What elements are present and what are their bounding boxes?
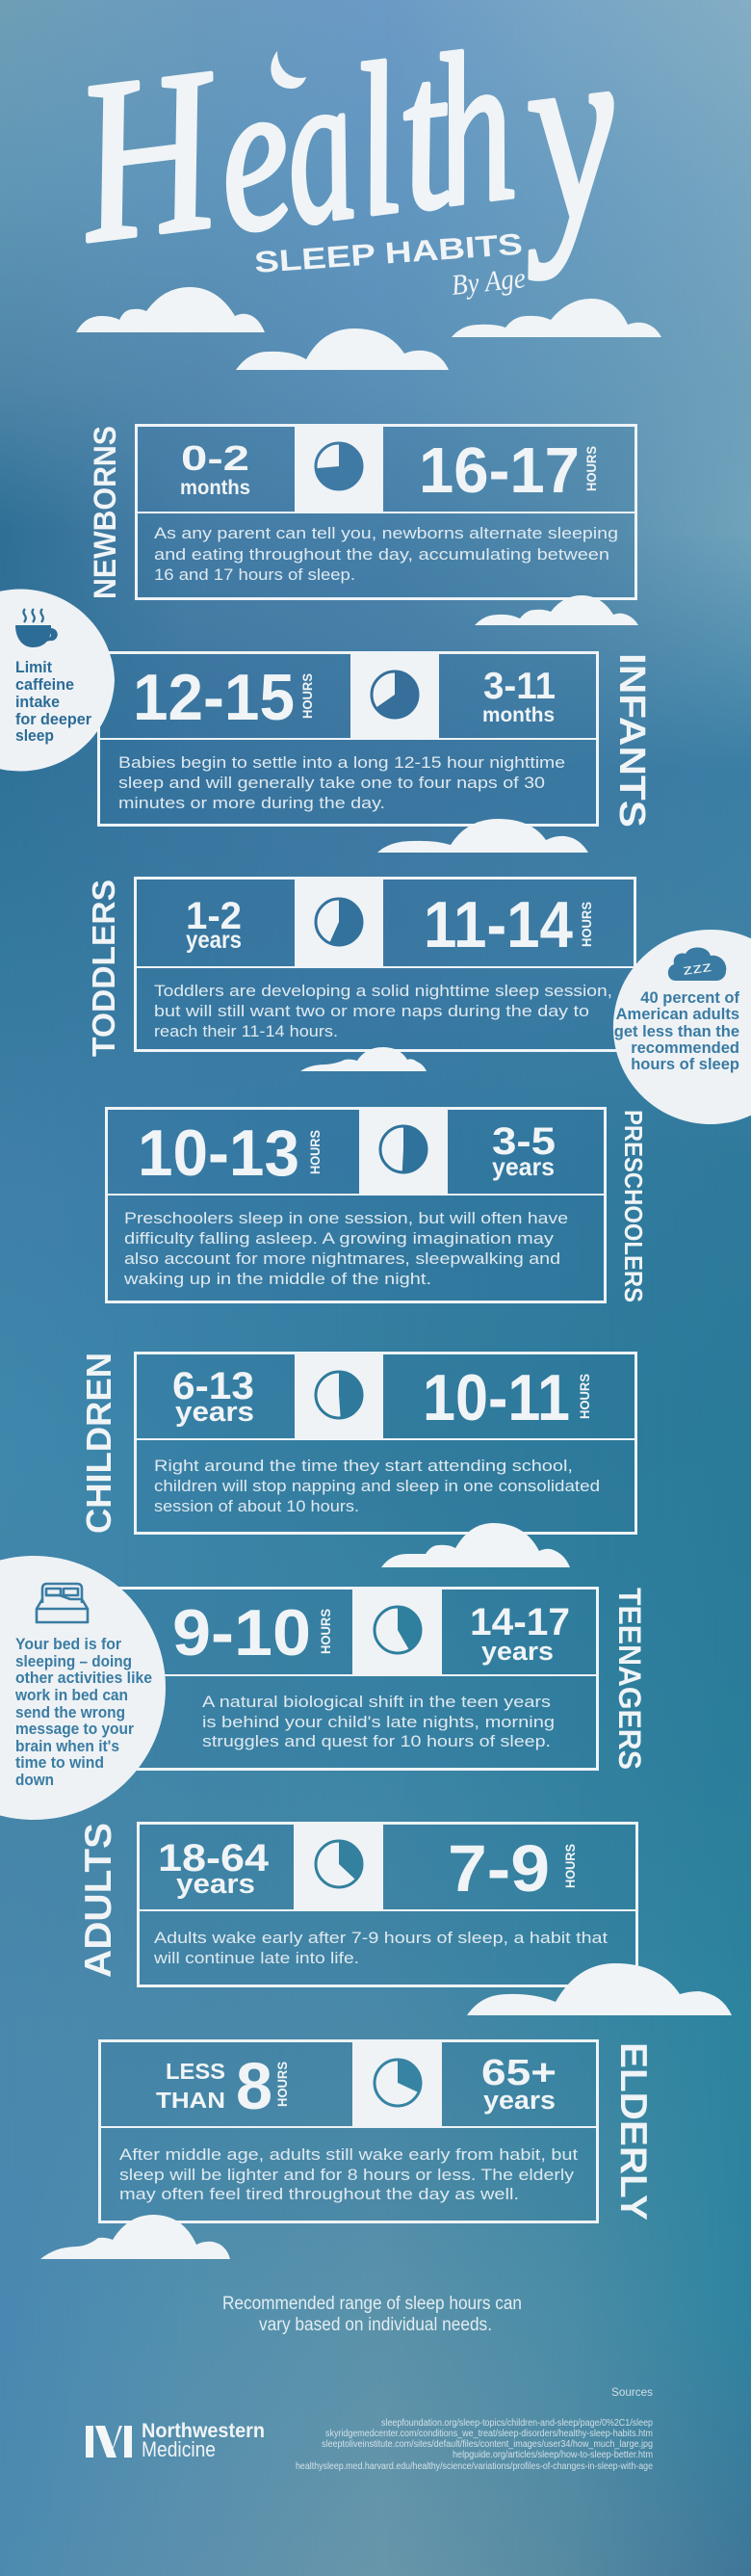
age: 3-5: 3-5 bbox=[492, 1120, 556, 1163]
description: will continue late into life. bbox=[153, 1949, 359, 1967]
icon: clock newborns bbox=[316, 443, 362, 489]
sources bbox=[296, 2385, 653, 2472]
tip text: intake bbox=[15, 694, 60, 711]
label: toddlers: TODDLERS bbox=[86, 880, 121, 1057]
tip text: brain when it's bbox=[15, 1738, 119, 1755]
hours unit: HOURS bbox=[307, 1130, 323, 1174]
title: Healthy: t bbox=[385, 11, 464, 256]
panel: infants bbox=[97, 651, 599, 827]
tip text: Limit bbox=[15, 659, 52, 676]
icon: clock children bbox=[316, 1372, 363, 1418]
cloud after toddlers bbox=[300, 1047, 427, 1071]
age: 65+: 65+ bbox=[481, 2053, 557, 2093]
cloud after newborns bbox=[475, 595, 638, 625]
label: elderly: ELDERLY bbox=[612, 2042, 654, 2221]
description: sleep and will generally take one to four naps of 30 bbox=[118, 774, 545, 792]
age: 6-13: 6-13 bbox=[172, 1365, 254, 1407]
description: is behind your child's late nights, morning bbox=[202, 1713, 555, 1731]
description: Adults wake early after 7-9 hours of sleep, a habit that bbox=[154, 1929, 608, 1947]
icon: clock preschoolers bbox=[380, 1126, 427, 1172]
description: 16 and 17 hours of sleep. bbox=[154, 565, 355, 584]
icon: clock elderly bbox=[375, 2060, 421, 2106]
label: infants: INFANTS bbox=[611, 653, 652, 828]
hours: 10-13: 10-13 bbox=[138, 1117, 299, 1190]
description: A natural biological shift in the teen years bbox=[202, 1693, 551, 1711]
callout: 40 percent bbox=[613, 930, 751, 1124]
age unit: years bbox=[483, 2086, 556, 2115]
description: may often feel tired throughout the day as well. bbox=[119, 2185, 519, 2203]
hours: less than 8: THAN bbox=[156, 2088, 225, 2113]
tip text: caffeine bbox=[15, 676, 74, 694]
sources: Sources bbox=[611, 2385, 653, 2399]
icon: coffee cup bbox=[15, 609, 58, 647]
tip text: time to wind bbox=[15, 1754, 104, 1772]
icon: sleeping cloud: zzz bbox=[682, 959, 712, 979]
panel: newborns bbox=[135, 424, 637, 600]
description: After middle age, adults still wake early from habit, but bbox=[119, 2145, 578, 2164]
description: children will stop napping and sleep in one consolidated bbox=[154, 1477, 600, 1495]
sources: sleeptoliveinstitute.com/sites/default/files/content_images/user34/how_much_large.jpg bbox=[322, 2439, 653, 2450]
hours: 9-10: 9-10 bbox=[172, 1596, 311, 1669]
age: 3-11: 3-11 bbox=[483, 666, 556, 707]
tip text: for deeper bbox=[15, 711, 92, 728]
label: preschoolers: PRESCHOOLERS bbox=[619, 1110, 648, 1302]
callout: caffeine bbox=[0, 590, 115, 771]
hours unit: HOURS bbox=[583, 446, 599, 491]
panel: preschoolers bbox=[105, 1107, 607, 1303]
label: children: CHILDREN bbox=[79, 1353, 118, 1534]
hours unit: HOURS bbox=[299, 673, 315, 719]
age unit: years bbox=[186, 927, 242, 954]
icon: clock adults bbox=[316, 1841, 362, 1887]
label: teenagers: TEENAGERS bbox=[612, 1588, 647, 1770]
age unit: months bbox=[482, 704, 555, 726]
logo: Northwestern Medicine: Northwestern bbox=[142, 2420, 265, 2442]
hours: less than 8 bbox=[156, 2049, 272, 2123]
callout: bed bbox=[0, 1556, 166, 1820]
subtitle: Sleep Habits: SLEEP HABITS bbox=[253, 227, 524, 279]
description: Preschoolers sleep in one session, but will often have bbox=[124, 1209, 568, 1227]
age unit: years bbox=[175, 1397, 254, 1428]
panel: children bbox=[134, 1352, 637, 1535]
hours: 10-11: 10-11 bbox=[423, 1361, 570, 1434]
description: difficulty falling asleep. A growing imagination may bbox=[124, 1229, 555, 1248]
icon: NM mark bbox=[86, 2426, 132, 2458]
description: Right around the time they start attending school, bbox=[154, 1457, 573, 1475]
panel: toddlers bbox=[134, 877, 636, 1052]
description: As any parent can tell you, newborns alternate sleeping bbox=[154, 524, 618, 542]
hours: 11-14: 11-14 bbox=[424, 888, 573, 961]
cloud left bbox=[76, 287, 265, 332]
cloud center bbox=[236, 329, 449, 370]
age: 14-17: 14-17 bbox=[470, 1601, 570, 1643]
age: 1-2: 1-2 bbox=[186, 895, 242, 937]
panel: elderly bbox=[98, 2039, 599, 2223]
description: Babies begin to settle into a long 12-15 hour nighttime bbox=[118, 753, 565, 772]
tip text: get less than the bbox=[614, 1023, 739, 1040]
sources: sleepfoundation.org/sleep-topics/children-and-sleep/page/0%2C1/sleep bbox=[381, 2418, 653, 2429]
panel: adults bbox=[137, 1822, 638, 1987]
age unit: years bbox=[176, 1869, 255, 1900]
title: Healthy: e bbox=[205, 31, 302, 278]
panel: teenagers bbox=[97, 1587, 599, 1771]
title: Healthy: h bbox=[422, 4, 526, 251]
closing note: Recommended range of sleep hours can bbox=[222, 2294, 522, 2314]
cloud after adults bbox=[467, 1963, 732, 2015]
logo: Northwestern Medicine bbox=[86, 2420, 265, 2461]
description: session of about 10 hours. bbox=[154, 1497, 359, 1515]
cloud after elderly bbox=[40, 2215, 230, 2259]
sources: healthysleep.med.harvard.edu/healthy/science/variations/profiles-of-changes-in-sleep-with-age bbox=[296, 2461, 653, 2472]
age unit: months bbox=[180, 477, 250, 499]
tip text: hours of sleep bbox=[631, 1056, 739, 1073]
hours unit: HOURS bbox=[318, 1609, 333, 1654]
tip text: sleeping – doing bbox=[15, 1653, 132, 1670]
age: 18-64: 18-64 bbox=[158, 1837, 270, 1879]
description: Toddlers are developing a solid nighttime sleep session, bbox=[154, 982, 612, 1000]
icon: clock infants bbox=[372, 671, 418, 718]
tip text: down bbox=[15, 1772, 54, 1789]
title: Healthy: H bbox=[63, 19, 237, 291]
hours unit: HOURS bbox=[579, 902, 594, 947]
cloud after infants bbox=[377, 819, 588, 853]
title block bbox=[63, 0, 634, 334]
tip text: other activities like bbox=[15, 1669, 152, 1687]
description: but will still want two or more naps during the day to bbox=[154, 1002, 589, 1020]
sources: helpguide.org/articles/sleep/how-to-sleep-better.htm bbox=[453, 2450, 653, 2460]
description: sleep will be lighter and for 8 hours or less. The elderly bbox=[119, 2166, 575, 2184]
tip text: American adults bbox=[616, 1006, 739, 1023]
description: minutes or more during the day. bbox=[118, 794, 385, 812]
cloud after children bbox=[381, 1523, 570, 1567]
label: adults: ADULTS bbox=[78, 1823, 119, 1978]
description: reach their 11-14 hours. bbox=[154, 1022, 338, 1040]
description: also account for more nightmares, sleepwalking and bbox=[124, 1249, 560, 1268]
tip text: Your bed is for bbox=[15, 1636, 122, 1653]
hours unit: HOURS bbox=[562, 1844, 578, 1888]
description: waking up in the middle of the night. bbox=[123, 1270, 431, 1288]
title: Healthy: l bbox=[340, 17, 413, 262]
age unit: years bbox=[481, 1637, 554, 1666]
description: struggles and quest for 10 hours of sleep. bbox=[202, 1732, 551, 1750]
icon: sleeping cloud bbox=[668, 947, 726, 981]
subtitle: By Age: By Age bbox=[450, 262, 527, 302]
icon: clock toddlers bbox=[316, 899, 362, 945]
tip text: send the wrong bbox=[15, 1704, 125, 1722]
icon: clock teenagers bbox=[375, 1607, 421, 1653]
tip text: recommended bbox=[631, 1039, 739, 1057]
description: and eating throughout the day, accumulating between bbox=[154, 545, 609, 564]
sources: skyridgemedcenter.com/conditions_we_treat/sleep-disorders/healthy-sleep-habits.htm bbox=[325, 2429, 653, 2439]
hours unit: HOURS bbox=[577, 1374, 592, 1419]
tip text: work in bed can bbox=[14, 1687, 128, 1704]
label: newborns: NEWBORNS bbox=[88, 426, 122, 599]
age unit: years bbox=[492, 1152, 555, 1181]
icon: crescent moon bbox=[271, 51, 306, 89]
hours: 12-15: 12-15 bbox=[133, 661, 295, 734]
cloud right bbox=[452, 299, 661, 337]
closing note: vary based on individual needs. bbox=[259, 2315, 492, 2335]
hours: less than 8: LESS bbox=[166, 2059, 225, 2084]
icon: bed bbox=[37, 1584, 88, 1622]
logo: Northwestern Medicine: Medicine bbox=[142, 2437, 216, 2461]
tip text: sleep bbox=[15, 727, 54, 745]
hours: 7-9: 7-9 bbox=[448, 1831, 550, 1906]
hours unit: HOURS bbox=[274, 2062, 290, 2107]
title: Healthy: a bbox=[271, 23, 367, 271]
hours: less than 8: 8 bbox=[236, 2049, 272, 2123]
tip text: message to your bbox=[15, 1721, 135, 1738]
hours: 16-17: 16-17 bbox=[419, 434, 580, 507]
age: 0-2 months: 0-2 bbox=[181, 438, 249, 478]
tip text: 40 percent of bbox=[640, 989, 740, 1007]
